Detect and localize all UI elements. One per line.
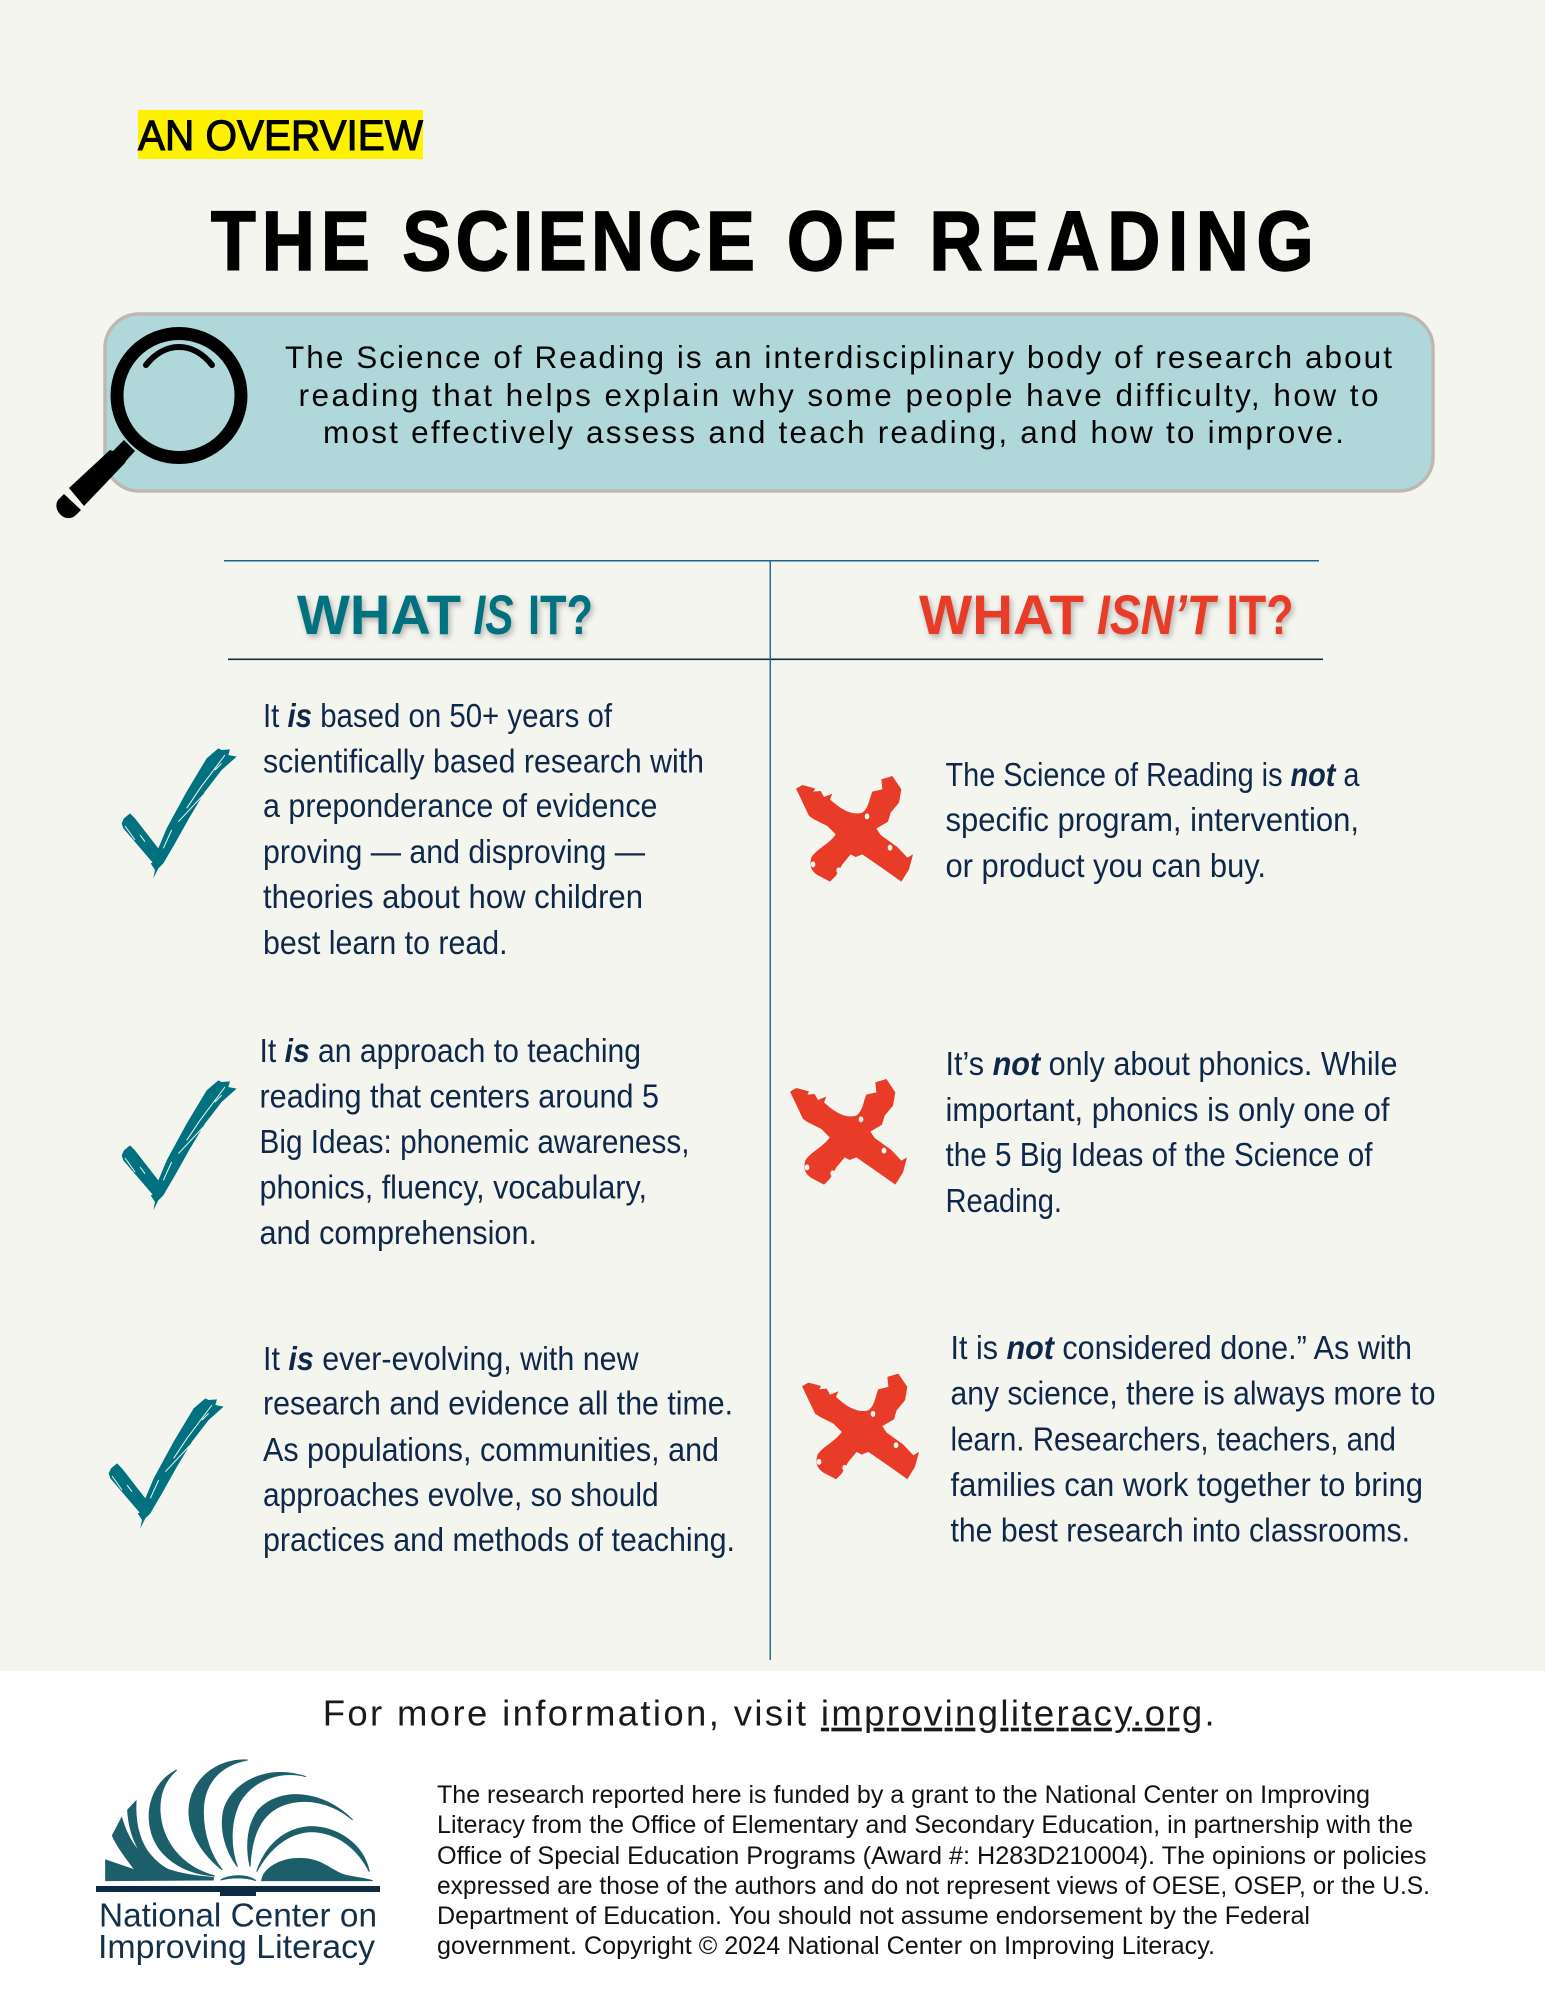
text: is not item 3: the best research into classrooms. [950, 1512, 1410, 1548]
text: is item 3: approaches evolve, so should [263, 1476, 659, 1513]
text: is item 3: It is ever-evolving, with new [263, 1340, 639, 1377]
title: READING [929, 194, 1314, 288]
text: is item 3: research and evidence all the time. [263, 1385, 733, 1422]
icon: red x 2 [790, 1079, 907, 1185]
icon: check mark 3 [109, 1398, 224, 1528]
heading: what is it: IT? [528, 583, 593, 646]
label: an overview: AN OVERVIEW [138, 113, 423, 160]
panel: definition callout [105, 314, 1433, 491]
text: is not item 3: It is not considered done.” As with [950, 1329, 1412, 1366]
text: is not item 2: It’s not only about phonics. While [946, 1045, 1398, 1082]
text: is item 1: proving — and disproving — [263, 833, 645, 870]
funding disclaimer: Literacy from the Office of Elementary and Secondary Education, in partnership with the [437, 1811, 1413, 1839]
definition text: The Science of Reading is an interdisciplinary body of research about [285, 339, 1392, 375]
funding disclaimer: government. Copyright © 2024 National Center on Improving Literacy. [437, 1932, 1215, 1960]
text: is item 2: and comprehension. [260, 1214, 537, 1251]
text: is not item 3: families can work together to bring [950, 1466, 1423, 1503]
heading: what isn't it: IT? [1226, 583, 1294, 646]
text: is item 1: scientifically based research with [263, 742, 704, 780]
title: THE [211, 194, 370, 288]
funding disclaimer: Office of Special Education Programs (Award #: H283D210004). The opinions or policies [437, 1842, 1426, 1870]
text: is item 3: As populations, communities, and [263, 1431, 719, 1468]
text: is item 3 [263, 1340, 735, 1558]
icon: red x 1 [796, 776, 913, 882]
icon: check mark 2 [122, 1080, 237, 1210]
text: is not item 2: important, phonics is only one of [946, 1091, 1390, 1128]
definition text [285, 339, 1392, 450]
heading: what isn't it: ISN’T [1097, 583, 1219, 646]
text: is not item 2: Reading. [946, 1182, 1062, 1219]
funding disclaimer: The research reported here is funded by a grant to the National Center on Improving [437, 1781, 1370, 1809]
text: is not item 1 [946, 756, 1360, 884]
logo mark: open book [96, 1760, 380, 1896]
icon: check mark 1 [122, 748, 237, 878]
icon: magnifying glass [56, 334, 241, 518]
heading: what is it [297, 583, 593, 646]
heading: what is it: IS [474, 583, 514, 646]
text: is item 2: Big Ideas: phonemic awareness, [260, 1123, 690, 1160]
text: is item 2: It is an approach to teaching [260, 1032, 641, 1069]
text: is not item 1: or product you can buy. [946, 847, 1266, 884]
icon: red x 3 [802, 1374, 919, 1479]
text: is item 2: reading that centers around 5 [260, 1078, 659, 1114]
logo wordmark: Improving Literacy [98, 1928, 376, 1965]
heading: what isn't it [919, 583, 1294, 646]
title: OF [787, 194, 897, 288]
text: is not item 1: specific program, intervention, [946, 801, 1359, 838]
logo wordmark [98, 1897, 377, 1965]
text: is not item 3: learn. Researchers, teachers, and [950, 1420, 1396, 1458]
funding disclaimer: Department of Education. You should not assume endorsement by the Federal [437, 1902, 1310, 1930]
funding disclaimer: expressed are those of the authors and do not represent views of OESE, OSEP, or the U.S. [437, 1872, 1430, 1900]
text: is item 1: theories about how children [263, 878, 643, 915]
text: is item 2: phonics, fluency, vocabulary, [260, 1169, 647, 1206]
text: is item 1: best learn to read. [263, 924, 508, 961]
text: is item 3: practices and methods of teaching. [263, 1521, 735, 1558]
definition text: reading that helps explain why some people have difficulty, how to [298, 377, 1378, 413]
title: SCIENCE [402, 194, 755, 288]
text: is not item 2 [946, 1045, 1398, 1219]
link line: for more information: For more information, visit improvingliteracy.org. [323, 1693, 1215, 1734]
title [211, 194, 1314, 288]
text: is not item 3 [950, 1329, 1436, 1548]
heading: what is it: WHAT [297, 583, 461, 646]
text: is item 1: a preponderance of evidence [263, 787, 658, 824]
text: is not item 3: any science, there is always more to [950, 1375, 1436, 1412]
heading: what isn't it: WHAT [919, 583, 1084, 646]
text: is not item 2: the 5 Big Ideas of the Science of [946, 1136, 1373, 1173]
text: is item 1 [263, 697, 704, 961]
text: is not item 1: The Science of Reading is not a [946, 756, 1360, 793]
text: is item 1: It is based on 50+ years of [263, 697, 613, 734]
logo: national center on improving literacy [96, 1760, 380, 1965]
funding disclaimer [437, 1781, 1430, 1960]
text: is item 2 [260, 1032, 690, 1251]
definition text: most effectively assess and teach reading, and how to improve. [323, 414, 1344, 450]
logo wordmark: National Center on [99, 1897, 377, 1934]
header dividers and column rule [224, 560, 1323, 1660]
